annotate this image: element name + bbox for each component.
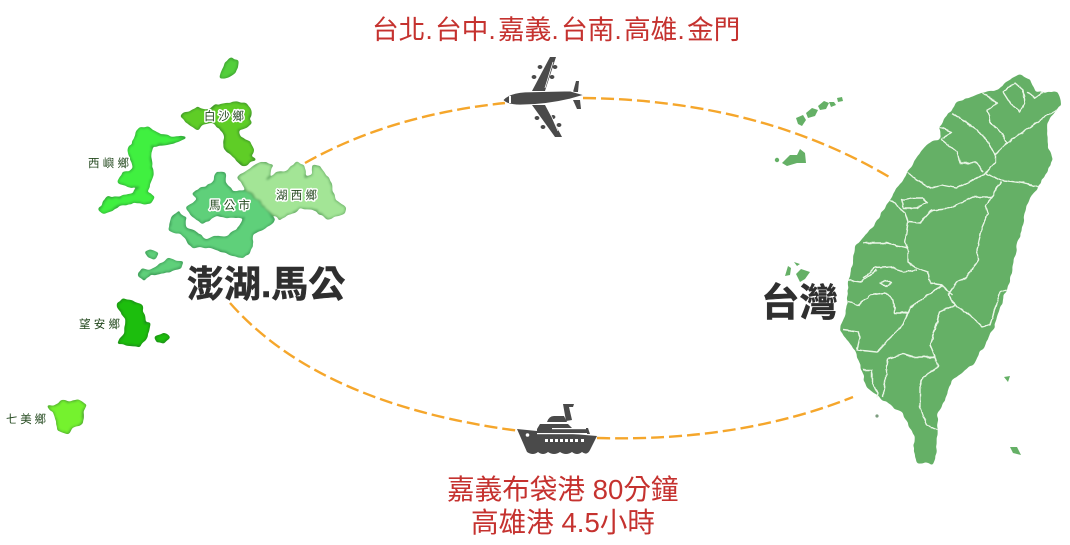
heading: Penghu Magong: 澎湖.馬公 <box>187 264 345 305</box>
Taiwan main island <box>840 75 1062 464</box>
label: Wangan: 望安鄉 <box>79 317 120 331</box>
label: Xiyu: 西嶼鄉 <box>88 156 130 170</box>
icon: ship <box>517 404 597 454</box>
island: long islet <box>138 259 182 280</box>
island: Wangan <box>118 299 150 346</box>
route: lower ferry path right <box>597 397 853 438</box>
island: Baisha <box>180 102 255 165</box>
map: Penghu islands <box>47 58 345 433</box>
island: northern islet <box>220 58 238 78</box>
outlying islands <box>775 97 1021 455</box>
text: flight cities: 台北.台中.嘉義.台南.高雄.金門 <box>372 15 740 45</box>
route: upper flight path right <box>583 98 891 178</box>
text: Kaohsiung ferry time: 高雄港 4.5小時 <box>471 507 655 538</box>
label: Magong: 馬公市 <box>209 198 250 212</box>
island: Huxi <box>237 162 345 220</box>
island: small islet <box>146 250 159 258</box>
island: Magong <box>168 172 274 258</box>
island: Xiyu <box>98 127 185 214</box>
route: lower ferry path left <box>230 303 520 431</box>
label: Huxi: 湖西鄉 <box>276 188 318 202</box>
county borders <box>843 83 1057 430</box>
label: Baisha: 白沙鄉 <box>204 109 244 123</box>
label: Qimei: 七美鄉 <box>6 412 46 426</box>
island: Wangan islet <box>155 333 170 343</box>
map: Taiwan <box>775 75 1062 464</box>
text: Budai ferry time: 嘉義布袋港 80分鐘 <box>447 474 679 505</box>
route: upper flight path left <box>305 103 505 163</box>
heading: Taiwan: 台灣 <box>761 282 838 325</box>
island: Qimei <box>47 400 86 433</box>
icon: airplane <box>503 57 584 137</box>
